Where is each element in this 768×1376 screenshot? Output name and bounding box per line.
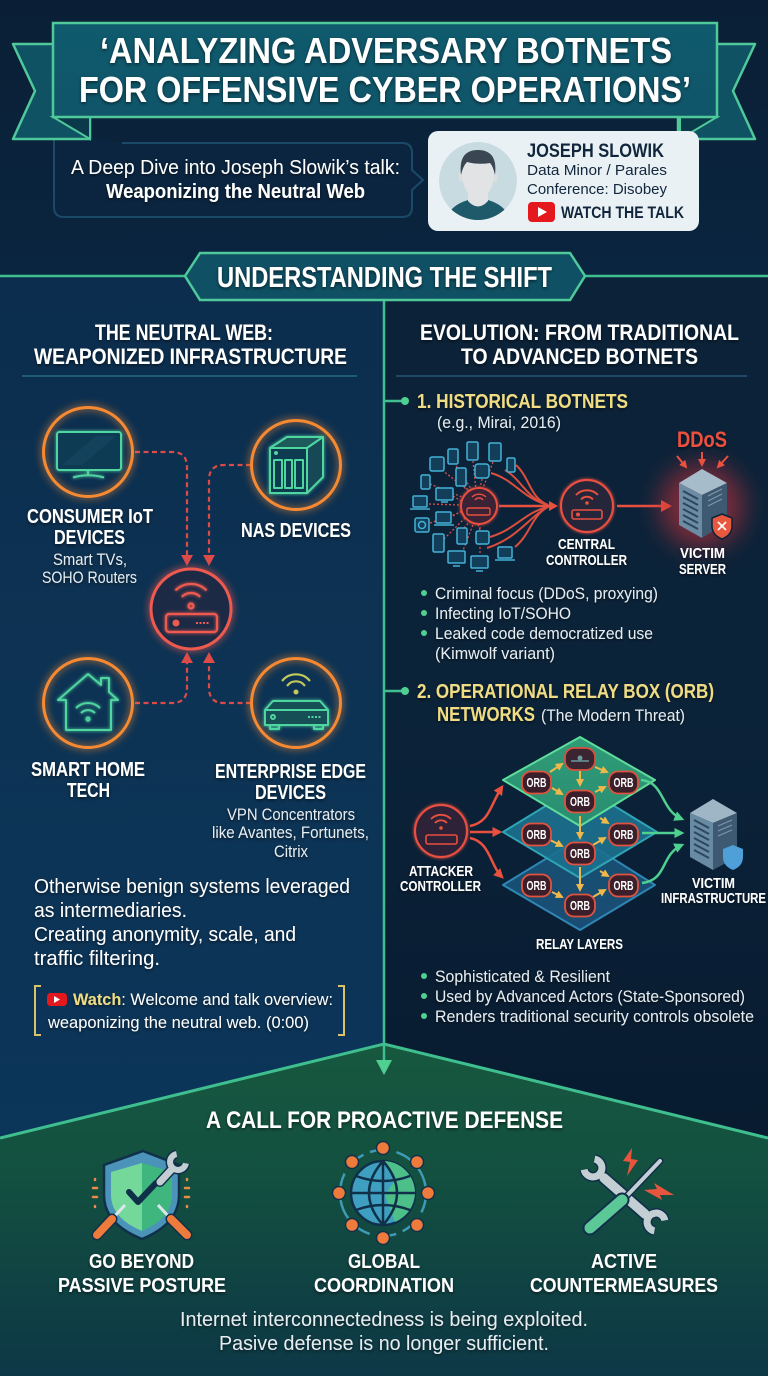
icon: youtube [528, 202, 555, 222]
title text [79, 30, 691, 110]
historical botnets heading: (e.g., Mirai, 2016) [437, 413, 561, 432]
icon: speaker avatar [439, 142, 517, 222]
heading: call for proactive defense: A CALL FOR PROACTIVE DEFENSE [206, 1107, 563, 1134]
layer: middle relay [503, 785, 657, 878]
label: victim server [679, 545, 726, 578]
label: victim server: SERVER [679, 561, 726, 578]
closing statement: Internet interconnectedness is being exploited. [180, 1308, 588, 1331]
ORB nodes [522, 772, 638, 916]
icon: consumer IoT device [44, 408, 132, 496]
label: victim infrastructure [661, 875, 766, 907]
section heading: understanding the shift: UNDERSTANDING THE SHIFT [217, 262, 552, 294]
icon: central compromised router [151, 569, 231, 649]
label: victim server: VICTIM [680, 545, 725, 562]
arrowheads into router [181, 555, 215, 663]
icon: connected globe [332, 1142, 434, 1244]
label: smart home tech: TECH [67, 780, 110, 802]
label: enterprise edge devices: like Avantes, Fortunets, [212, 823, 369, 842]
label: victim infrastructure: VICTIM [692, 875, 735, 892]
paragraph: benign systems: as intermediaries. [34, 900, 187, 922]
label: DDoS with arrows [677, 427, 728, 467]
label: central controller: CENTRAL [558, 536, 615, 553]
label: NAS devices: NAS DEVICES [241, 520, 351, 542]
diagram: botnet cluster [410, 442, 558, 571]
label: attacker controller: ATTACKER [409, 863, 473, 880]
ORB labels: ORB [570, 899, 590, 913]
label: smart home tech [31, 759, 145, 802]
ORB labels: ORB [614, 828, 634, 842]
bullet list: ORB: Used by Advanced Actors (State-Sponsored) [435, 987, 745, 1006]
label: active countermeasures: ACTIVE [591, 1251, 657, 1273]
arrow: controller to victim [617, 500, 672, 512]
icon: NAS device [252, 420, 340, 510]
icon: blue shield [723, 845, 743, 870]
label: active countermeasures [530, 1251, 718, 1297]
section heading: understanding the shift [185, 253, 585, 300]
callout: watch timestamp [35, 986, 344, 1035]
panel: left background [0, 277, 384, 1138]
node: top router [565, 748, 595, 770]
icon: central controller [561, 480, 613, 532]
bullet list: ORB [421, 967, 754, 1026]
speaker card [428, 131, 699, 231]
icon: smart home [44, 658, 132, 748]
label: consumer IoT: DEVICES [54, 527, 125, 549]
label: enterprise edge devices: VPN Concentrators [227, 805, 355, 824]
icon: attacker controller [415, 805, 467, 857]
title ribbon banner [13, 23, 755, 139]
layer: top relay [503, 737, 655, 826]
arrows: attacker into relay layers [470, 787, 502, 877]
bullet list: historical: Leaked code democratized use [435, 624, 653, 643]
label: DDoS with arrows: DDoS [677, 427, 727, 452]
label: central controller: CONTROLLER [546, 552, 627, 569]
label: smart home tech: SMART HOME [31, 759, 145, 781]
closing statement [180, 1308, 588, 1355]
title text: FOR OFFENSIVE CYBER OPERATIONS’ [79, 69, 691, 110]
label: global coordination: GLOBAL [348, 1251, 420, 1273]
bullet list: ORB: Sophisticated & Resilient [435, 967, 610, 986]
label: go beyond passive posture [58, 1251, 226, 1297]
icon: youtube small [47, 993, 67, 1006]
historical botnets heading [384, 390, 628, 432]
label: enterprise edge devices [212, 761, 369, 861]
label: enterprise edge devices: ENTERPRISE EDGE [215, 761, 366, 783]
dashed connectors to router [135, 452, 251, 703]
bullet list: ORB: Renders traditional security controls obsolete [435, 1007, 754, 1026]
arrow: into defense section [376, 1060, 392, 1075]
right heading: evolution: TO ADVANCED BOTNETS [461, 344, 698, 369]
paragraph: benign systems: traffic filtering. [34, 948, 160, 970]
label: consumer IoT: SOHO Routers [42, 568, 137, 587]
callout: watch timestamp: weaponizing the neutral web. (0:00) [47, 1014, 309, 1032]
label: consumer IoT: CONSUMER IoT [27, 506, 153, 528]
ORB labels [526, 776, 634, 913]
label: active countermeasures: COUNTERMEASURES [530, 1275, 718, 1297]
label: go beyond passive posture: GO BEYOND [89, 1251, 194, 1273]
ORB labels: ORB [570, 795, 590, 809]
icon: shield with tools [93, 1151, 189, 1239]
callout: watch timestamp: Watch: Welcome and talk overview: [73, 991, 333, 1009]
ORB networks heading [384, 680, 714, 726]
icon: infected router [461, 488, 497, 524]
bullet list: historical: Infecting IoT/SOHO [435, 604, 571, 623]
label: global coordination: COORDINATION [314, 1275, 454, 1297]
roof divider [0, 1044, 768, 1138]
ORB labels: ORB [614, 776, 634, 790]
label: go beyond passive posture: PASSIVE POSTURE [58, 1275, 226, 1297]
historical botnets heading: 1. HISTORICAL BOTNETS [417, 390, 628, 413]
subtitle callout [54, 130, 423, 217]
label: consumer IoT: Smart TVs, [53, 550, 127, 569]
speaker card: Data Minor / Parales [527, 162, 667, 179]
ORB networks heading: NETWORKS [437, 703, 535, 726]
left heading: neutral web: WEAPONIZED INFRASTRUCTURE [34, 344, 347, 369]
left heading: neutral web: THE NEUTRAL WEB: [95, 320, 273, 345]
icon: victim server [660, 464, 744, 548]
speaker card: WATCH THE TALK [561, 204, 684, 222]
icon: red alert shield [712, 514, 732, 539]
label: attacker controller: CONTROLLER [400, 878, 481, 895]
label: attacker controller [400, 863, 481, 895]
icon: victim infrastructure server [690, 799, 743, 870]
ORB labels: ORB [570, 847, 590, 861]
paragraph: benign systems: Otherwise benign systems leveraged [34, 876, 350, 898]
subtitle callout: Weaponizing the Neutral Web [106, 181, 365, 203]
bullet list: historical: (Kimwolf variant) [435, 644, 555, 663]
label: consumer IoT [27, 506, 153, 587]
paragraph: benign systems [34, 876, 350, 970]
icon: crossed tools [584, 1148, 674, 1231]
bullet list: historical: Criminal focus (DDoS, proxying) [435, 584, 658, 603]
paragraph: benign systems: Creating anonymity, scale, and [34, 924, 296, 946]
arrows: relay layers to victim [641, 780, 682, 883]
ORB labels: ORB [526, 879, 546, 893]
closing statement: Pasive defense is no longer sufficient. [219, 1332, 549, 1355]
layer: bottom relay [503, 838, 655, 930]
speaker card: JOSEPH SLOWIK [527, 140, 664, 162]
left heading: neutral web [22, 320, 357, 377]
panel: right background [384, 277, 768, 1138]
subtitle callout: A Deep Dive into Joseph Slowik’s talk: [71, 157, 400, 179]
ORB networks heading: (The Modern Threat) [541, 706, 685, 725]
ORB networks heading: 2. OPERATIONAL RELAY BOX (ORB) [417, 680, 714, 703]
label: relay layers: RELAY LAYERS [536, 937, 623, 953]
diagram: relay layers [503, 737, 657, 930]
icon: enterprise edge [252, 658, 340, 748]
ORB labels: ORB [614, 879, 634, 893]
label: global coordination [314, 1251, 454, 1297]
bullet list: historical [421, 584, 658, 663]
title text: ‘ANALYZING ADVERSARY BOTNETS [100, 30, 672, 71]
right heading: evolution [396, 320, 747, 377]
label: enterprise edge devices: DEVICES [255, 782, 326, 804]
section divider lines [0, 276, 768, 1062]
panel: bottom background [0, 1044, 768, 1376]
label: enterprise edge devices: Citrix [274, 842, 308, 861]
background: page [0, 0, 768, 277]
label: central controller [546, 536, 627, 569]
speaker card: Conference: Disobey [527, 181, 667, 198]
ORB labels: ORB [526, 828, 546, 842]
ORB labels: ORB [526, 776, 546, 790]
